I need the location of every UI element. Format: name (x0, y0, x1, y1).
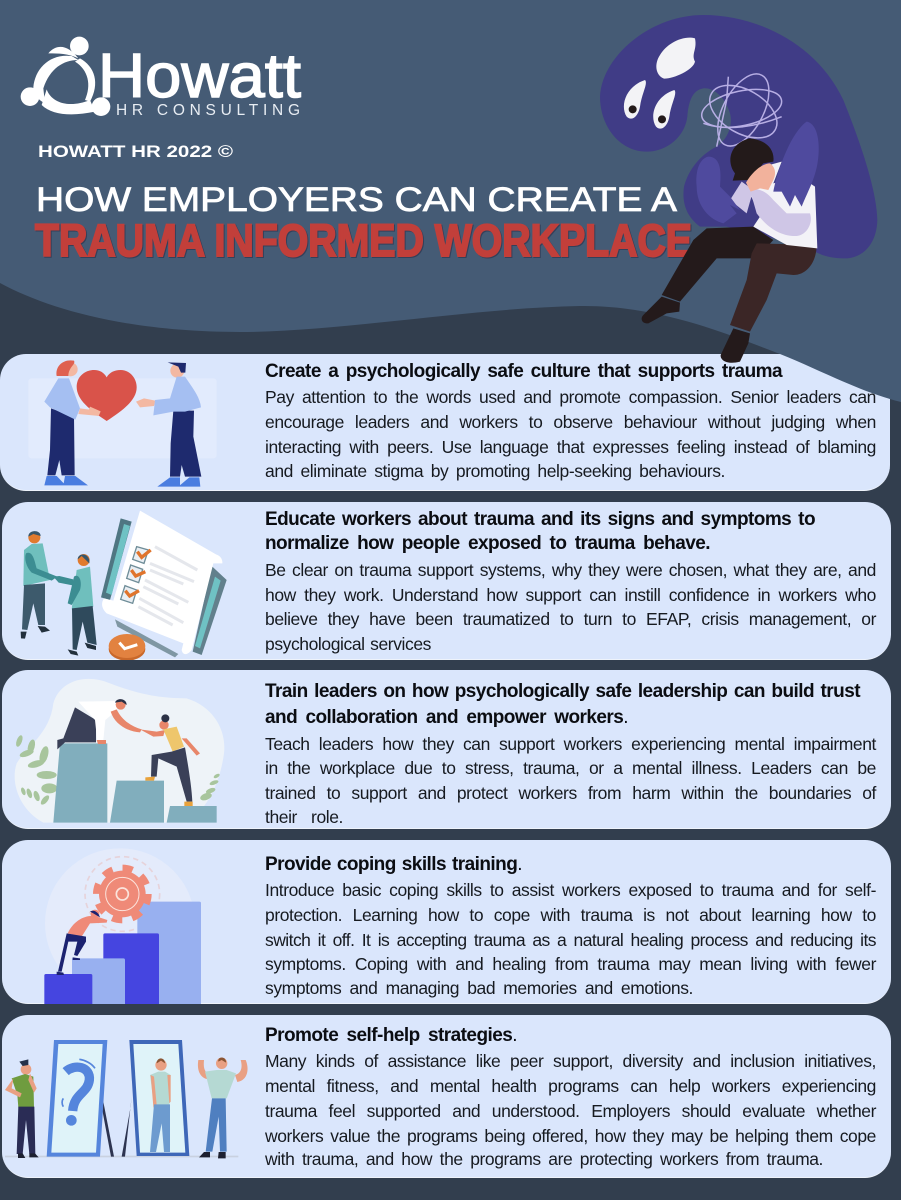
illustration: anxious person with shadow monster (600, 15, 877, 363)
body text: switch it off. It is accepting trauma as a natural healing process and reducing its (265, 930, 876, 950)
body text: believe they have been traumatized to turn to EFAP, crisis management, or (265, 609, 876, 629)
logo: HR CONSULTING (116, 102, 300, 119)
body text: encourage leaders and workers to observe behaviour without judging when (265, 412, 876, 432)
body text: protection. Learning how to cope with trauma is not about learning how to (265, 905, 876, 925)
panel: promote self-help strategies (2, 1015, 891, 1178)
title: TRAUMA INFORMED WORKPLACE (35, 215, 692, 266)
body text: their role. (265, 807, 343, 827)
body text: in the workplace due to stress, trauma, or a mental illness. Leaders can be (265, 758, 876, 778)
panel: educate workers about trauma (2, 502, 891, 660)
illustration: pushing a gear up the steps (44, 848, 201, 1004)
body text: trained to support and protect workers from harm within the boundaries of (265, 783, 876, 803)
title (35, 181, 692, 266)
body text (265, 734, 876, 827)
heading: Train leaders on how psychologically safe leadership can build trust (265, 681, 860, 702)
body text: and eliminate stigma by promoting help-seeking behaviours. (265, 461, 725, 481)
panel: create a psychologically safe culture (0, 354, 890, 491)
title: HOW EMPLOYERS CAN CREATE A (36, 181, 677, 219)
illustration: man and mirrors (5, 1040, 248, 1158)
body text: symptoms. Coping with and healing from trauma may mean living with fewer (265, 954, 876, 974)
heading: normalize how people exposed to trauma behave. (265, 533, 710, 554)
body text: psychological services (265, 634, 431, 654)
heading: Create a psychologically safe culture that supports trauma (265, 361, 782, 382)
heading: Promote self-help strategies. (265, 1025, 517, 1046)
body text (265, 880, 876, 998)
panel: train leaders on psychologically safe leadership (2, 670, 891, 829)
body text (265, 1051, 876, 1169)
body text: Be clear on trauma support systems, why they were chosen, what they are, and (265, 560, 876, 580)
body text: mental fitness, and mental health programs can help workers experiencing (265, 1076, 876, 1096)
body text: interacting with peers. Use language that expresses feeling instead of blaming (265, 437, 876, 457)
body text: workers value the programs being offered, how they may be helping them cope (265, 1126, 876, 1146)
logo (21, 37, 301, 119)
body text: trauma feel supported and understood. Employers should evaluate whether (265, 1101, 876, 1121)
body text: how they work. Understand how support can instill confidence in workers who (265, 585, 876, 605)
body text: with trauma, and how the programs are protecting workers from trauma. (265, 1149, 823, 1169)
body text (265, 387, 876, 481)
body text: symptoms and managing bad memories and emotions. (265, 978, 693, 998)
header banner (0, 0, 901, 402)
heading (265, 509, 815, 554)
panel: provide coping skills training (2, 840, 891, 1004)
heading: and collaboration and empower workers. (265, 707, 628, 728)
heading: Provide coping skills training. (265, 854, 522, 875)
copyright line: HOWATT HR 2022 © (38, 142, 234, 161)
body text: Many kinds of assistance like peer support, diversity and inclusion initiatives, (265, 1051, 876, 1071)
heading (265, 681, 860, 728)
illustration: two people sharing a heart (44, 360, 202, 487)
illustration: helping hand on steps (14, 679, 224, 823)
body text (265, 560, 876, 654)
heading: Educate workers about trauma and its signs and symptoms to (265, 509, 815, 530)
body text: Pay attention to the words used and promote compassion. Senior leaders can (265, 387, 876, 407)
logo: Howatt (98, 42, 301, 111)
illustration: handshake and checklist (20, 510, 227, 660)
body text: Introduce basic coping skills to assist workers exposed to trauma and for self- (265, 880, 876, 900)
body text: Teach leaders how they can support workers experiencing mental impairment (265, 734, 876, 754)
